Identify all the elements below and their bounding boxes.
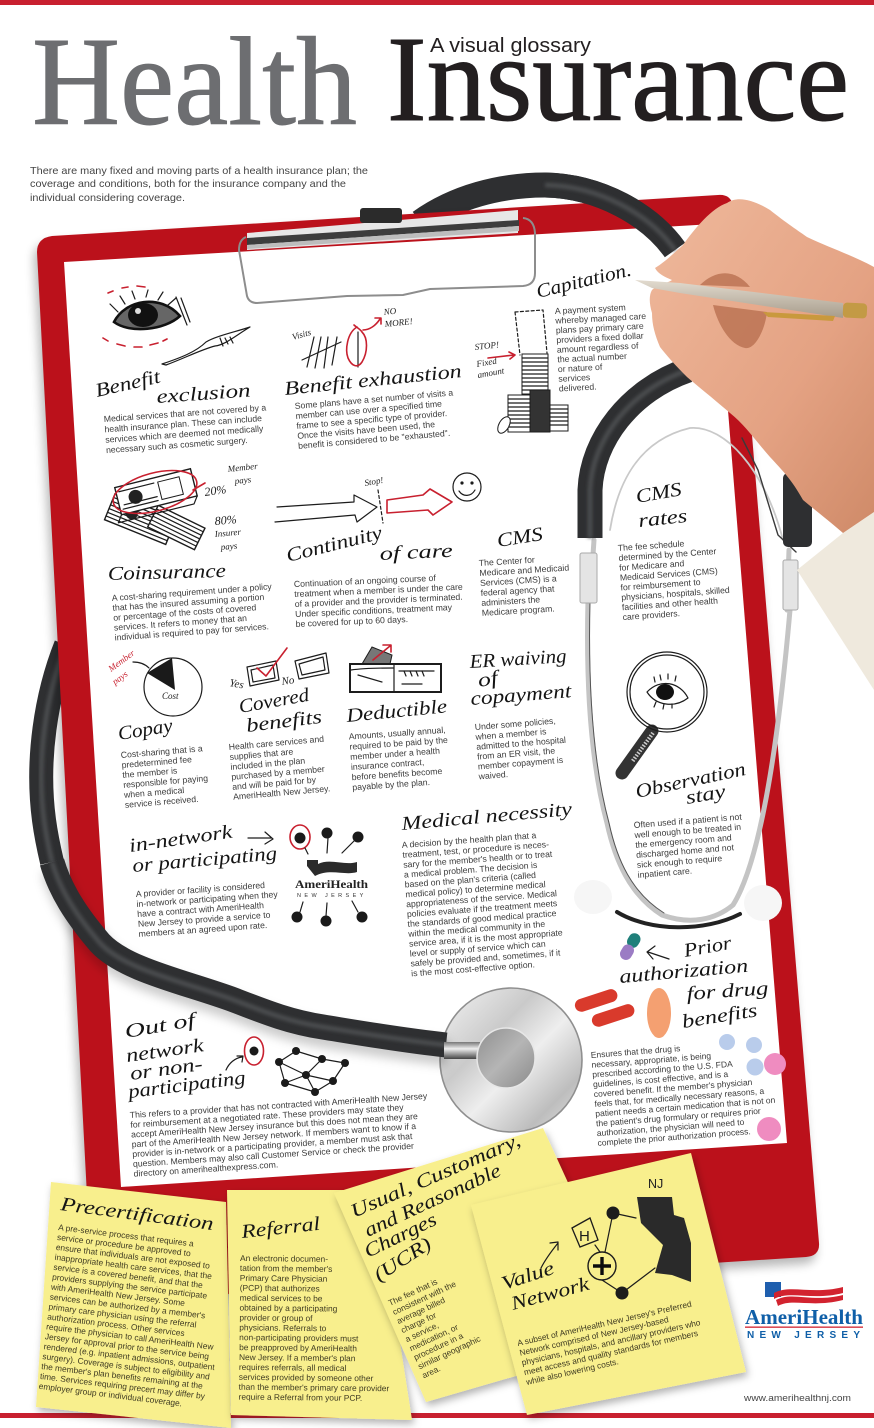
body text: service is a covered benefit, and that the: [53, 1262, 204, 1290]
body text: Some plans have a set number of visits a: [294, 387, 454, 411]
AmeriHealth logo: [745, 1282, 863, 1341]
body text: Continuation of an ongoing course of: [294, 573, 437, 589]
body text: level or supply of service which can: [409, 939, 546, 959]
entry: covered benefits: [228, 648, 331, 802]
body text: non-participating providers must: [239, 1332, 359, 1343]
body text: appropriateness of the service. Medical: [406, 888, 557, 909]
body text: responsible for paying: [123, 773, 208, 790]
icon: coin stacks with fixed amount: STOP!: [474, 339, 499, 352]
body text: and will be paid for by: [232, 774, 317, 792]
body text: Medicaid Services (CMS): [620, 566, 718, 583]
heading: medical necessity: Medical necessity: [399, 799, 573, 835]
body text: while also lowering costs.: [524, 1356, 619, 1387]
body text: require a Referral from your PCP.: [239, 1392, 362, 1403]
body text: physicians, hospitals, skilled: [621, 585, 730, 602]
heading: ER waiving of copayment: ER waiving: [468, 646, 567, 673]
body text: Network comprised of New Jersey-based: [518, 1314, 670, 1358]
shirt cuff: [797, 512, 874, 690]
sticky note: usual customary and reasonable: [334, 1128, 640, 1402]
body text: New Jersey to provide a service to: [138, 910, 271, 929]
body text: well enough to be treated in: [633, 822, 742, 840]
heading: capitation: Capitation.: [534, 260, 633, 303]
sticky note: value network: [471, 1153, 746, 1415]
heading: covered benefits: Covered: [237, 685, 311, 718]
icon: tally marks with red circle: [291, 306, 413, 368]
heading: CMS rates: CMS: [634, 479, 683, 508]
body text: services which are deemed not medically: [105, 423, 264, 445]
heading: [499, 1258, 592, 1315]
body text: services can be authorized by a member's: [49, 1292, 206, 1321]
heading: prior authorization for drug benefits: authorization: [619, 956, 749, 988]
body text: procedure in a: [412, 1330, 465, 1362]
entry: coinsurance: [105, 461, 276, 642]
body text: question. Members may also call Customer Service or check the provider: [133, 1141, 414, 1169]
body text: obtained by a participating: [239, 1302, 338, 1314]
body text: area.: [420, 1363, 442, 1380]
heading: benefit exclusion: Benefit: [93, 366, 163, 402]
body text: the patient's drug formulary or requires prior: [596, 1106, 761, 1128]
body text: within the medical community in the: [407, 919, 546, 939]
body text: the standards of good medical practice: [407, 908, 557, 929]
body text: This refers to a provider that has not contracted with AmeriHealth New Jersey: [129, 1091, 428, 1120]
heading: ER waiving of copayment: [468, 646, 573, 710]
heading: ER waiving of copayment: copayment: [470, 681, 573, 710]
wire sleeves: [580, 553, 597, 603]
body text: for Medicare and: [619, 558, 685, 573]
body text: New Jersey. If a member's plan: [239, 1352, 356, 1363]
heading: out of network or non-participating: Out of: [123, 1009, 200, 1043]
body text: sick enough to require: [637, 853, 723, 870]
body text: Medicare and Medicaid: [479, 563, 570, 578]
heading: continuity of care: Continuity: [284, 523, 385, 567]
body text: rendered (e.g. inpatient admissions, outpatient: [43, 1341, 216, 1372]
icon: coin stacks with fixed amount: [474, 310, 568, 435]
body text: federal agency that: [480, 583, 555, 598]
heading: out of network or non-participating: [123, 1009, 247, 1103]
body text: complete the prior authorization process.: [597, 1126, 751, 1148]
body text: insurance contract,: [351, 757, 425, 772]
entry: copay: [105, 648, 210, 810]
body text: average billed: [395, 1295, 447, 1326]
body text: necessary, appropriate, is being: [591, 1051, 712, 1070]
body text: require the physician to call AmeriHealth New: [46, 1321, 215, 1352]
heading: benefit exhaustion: Benefit exhaustion: [283, 361, 463, 400]
entry: continuity of care: [275, 473, 481, 629]
body text: Under specific conditions, treatment may: [295, 602, 453, 619]
stethoscope front tube: [52, 862, 448, 1053]
body text: Health care services and: [228, 734, 325, 752]
heading: in-network or participating: in-network: [128, 822, 234, 857]
icon: money stacks with percentages: [105, 461, 259, 552]
body text: charge for: [399, 1310, 438, 1335]
title: Health: [32, 13, 357, 152]
entry: in-network or participating: [128, 822, 368, 939]
entry: benefit exclusion: [93, 286, 269, 455]
stethoscope tube behind clipboard: [41, 185, 675, 862]
AmeriHealth logo: AmeriHealth: [745, 1305, 863, 1329]
body text: from an ER visit, the: [477, 745, 556, 762]
body text: facilities and other health: [622, 596, 718, 612]
body text: the emergency room and: [635, 832, 732, 850]
heading: observation stay: stay: [684, 781, 728, 809]
entry: capitation: [474, 260, 650, 435]
body text: Amounts, usually annual,: [348, 725, 446, 741]
intro text: There are many fixed and moving parts of a health insurance plan; the: [30, 166, 368, 177]
body text: Services (CMS) is a: [480, 573, 557, 588]
body text: Ensures that the drug is: [590, 1043, 681, 1060]
icon: money stacks with percentages: 80%: [214, 512, 237, 528]
body text: covered benefit. If the member's physician: [593, 1077, 753, 1099]
heading: Usual, Customary,: [348, 1130, 524, 1223]
body text: Medical services that are not covered by a: [103, 402, 267, 424]
body text: member can use over a specified time: [295, 398, 442, 421]
title: [32, 12, 849, 152]
heading: observation stay: Observation: [634, 759, 748, 803]
heading: out of network or non-participating: network: [125, 1035, 205, 1067]
heading: deductible: Deductible: [344, 696, 448, 727]
body text: A payment system: [555, 302, 626, 316]
body text: part of the AmeriHealth New Jersey network. If members want to know if a: [131, 1121, 416, 1149]
icon: arrows with stop line and smiley: Stop!: [364, 475, 384, 488]
entry: observation stay: [622, 652, 748, 880]
body text: A subset of AmeriHealth New Jersey's Preferred: [516, 1299, 693, 1348]
heading: out of network or non-participating: or non-: [129, 1054, 204, 1085]
icon: provider network around logo: [290, 825, 368, 926]
body text: physicians, hospitals, and ancillary providers who: [521, 1317, 702, 1367]
body text: employer group or individual coverage.: [38, 1381, 183, 1408]
body text: necessary such as cosmetic surgery.: [106, 435, 248, 455]
icon: New Jersey network diagram: [541, 1177, 691, 1300]
heading: and Reasonable: [361, 1160, 505, 1242]
heading: covered benefits: [237, 685, 323, 737]
body text: Cost-sharing that is a: [120, 743, 203, 760]
intro text: [30, 166, 368, 204]
body text: be covered for up to 60 days.: [295, 614, 408, 629]
body text: The fee that is: [387, 1276, 439, 1308]
stethoscope ear tips: [574, 880, 782, 921]
heading: Precertification: [58, 1194, 215, 1235]
body text: or nature of: [558, 362, 603, 374]
body text: A pre-service process that requires a: [58, 1222, 195, 1249]
body text: have a contract with AmeriHealth: [137, 900, 264, 919]
heading: out of network or non-participating: participating: [125, 1068, 247, 1103]
icon: yes and no checkboxes: No: [280, 674, 296, 688]
heading: [348, 1130, 524, 1286]
body text: Often used if a patient is not: [633, 811, 743, 830]
spring band: [617, 912, 740, 927]
arrow: [248, 832, 273, 844]
heading: Network: [508, 1274, 592, 1315]
body text: time. Services requiring precert may differ by: [39, 1371, 206, 1401]
body text: sary for the member's health or to treat: [403, 849, 553, 870]
heading: Charges: [361, 1209, 440, 1262]
body text: based on the plan's criteria (called: [404, 870, 536, 889]
clip button: [360, 208, 402, 223]
body text: the actual number: [557, 351, 627, 364]
body text: medical services to be: [240, 1293, 323, 1303]
heading: continuity of care: of care: [379, 541, 454, 565]
entry: ER waiving of copayment: [468, 646, 573, 781]
body text: authorization process. Other services: [47, 1311, 185, 1338]
subtitle: A visual glossary: [430, 35, 591, 57]
body text: benefit is considered to be "exhausted".: [298, 428, 451, 451]
body text: A cost-sharing requirement under a policy: [111, 581, 273, 603]
icon: tally marks with red circle: Visits: [291, 327, 313, 342]
body text: amount regardless of: [557, 340, 639, 355]
icon: money stacks with percentages: Insurer: [213, 527, 242, 539]
heading: coinsurance: Coinsurance: [108, 561, 226, 585]
body text: a service,: [404, 1320, 440, 1344]
icon: pie chart of cost: [105, 648, 202, 716]
pen: [635, 280, 867, 321]
icon: tally marks with red circle: NO: [382, 306, 397, 317]
body text: predetermined fee: [121, 754, 192, 770]
body text: service area, if it is the most appropriate: [409, 927, 563, 949]
icon: money stacks with percentages: 20%: [203, 482, 227, 499]
body text: included in the plan: [230, 755, 306, 772]
body text: admitted to the hospital: [476, 735, 566, 752]
stethoscope top arch: [545, 185, 675, 250]
body text: medication, or: [408, 1322, 460, 1353]
heading: Value: [499, 1258, 557, 1295]
icon: tally marks with red circle: MORE!: [383, 316, 413, 329]
body text: providers supplying the service participate: [52, 1272, 208, 1301]
entry: benefit exhaustion: [283, 306, 463, 451]
body text: in-network or participating when they: [136, 889, 279, 909]
heading: prior authorization for drug benefits: Prior: [681, 933, 734, 962]
body text: accept AmeriHealth New Jersey insurance but this does not mean they are: [131, 1111, 418, 1140]
body text: required to be paid by the: [349, 735, 448, 752]
icon: assorted pills: [573, 931, 786, 1141]
body text: purchased by a member: [231, 764, 325, 782]
heading: in-network or participating: [128, 822, 278, 877]
body text: requires referrals, all medical: [239, 1362, 347, 1373]
clipboard shadow: [34, 202, 816, 1309]
heading: copay: Copay: [116, 716, 174, 745]
body text: care providers.: [622, 608, 680, 622]
body text: or percentage of the costs of covered: [113, 602, 257, 623]
icon: money stacks with percentages: pays: [219, 541, 238, 552]
body text: policies evaluate if the treatment meets: [406, 898, 558, 919]
clipboard metal clip: [239, 208, 535, 303]
body text: inappropriate health care services, that the: [54, 1252, 213, 1281]
entry: CMS rates: [617, 479, 732, 622]
sticky note: precertification: [36, 1182, 231, 1428]
body text: is the most cost-effective option.: [411, 959, 535, 978]
icon: yes and no checkboxes: [228, 648, 329, 691]
body text: similar geographic: [416, 1333, 482, 1371]
body text: when a medical: [123, 785, 185, 800]
heading: (UCR): [370, 1234, 435, 1286]
body text: determined by the Center: [618, 546, 717, 563]
icon: money stacks with percentages: Member: [226, 461, 259, 474]
heading: prior authorization for drug benefits: benefits: [680, 1000, 759, 1033]
body text: supplies that are: [229, 746, 294, 762]
heading: benefit exclusion: exclusion: [156, 380, 251, 408]
icon: arrows with stop line and smiley: [275, 473, 481, 523]
heading: covered benefits: benefits: [245, 707, 323, 737]
icon: money stacks with percentages: pays: [233, 474, 252, 486]
icon: provider network around logo: AmeriHealth: [295, 877, 368, 891]
icon: New Jersey network diagram: NJ: [648, 1177, 663, 1191]
body text: primary care physician using the referral: [48, 1301, 197, 1330]
icon: pie chart of cost: Member: [105, 648, 137, 674]
body text: of a provider and the provider is terminated.: [295, 592, 463, 609]
heading: benefit exclusion: [93, 366, 251, 408]
entry: prior authorization: [573, 931, 786, 1148]
body text: An electronic documen-: [240, 1253, 328, 1264]
body text: member copayment is: [477, 755, 564, 771]
body text: Under some policies,: [474, 716, 556, 732]
bottom red bar: [0, 1413, 874, 1418]
icon: open wallet: [350, 645, 441, 692]
body text: provider is in-network or a participating provider, a member must ask that: [132, 1131, 413, 1159]
icon: coin stacks with fixed amount: amount: [477, 365, 505, 380]
body text: service is received.: [124, 794, 199, 810]
body text: consistent with the: [391, 1279, 458, 1317]
body text: (PCP) that authorizes: [240, 1283, 320, 1294]
body text: A decision by the health plan that a: [401, 830, 537, 850]
body text: inpatient care.: [637, 866, 692, 880]
intro text: coverage and conditions, both for the insurance company and the: [30, 179, 346, 190]
body text: for reimbursement at a negotiated rate. These providers may state they: [130, 1102, 404, 1130]
body text: payable by the plan.: [352, 777, 430, 792]
icon: New Jersey network diagram: H: [579, 1228, 590, 1245]
body text: AmeriHealth New Jersey.: [233, 783, 331, 802]
body text: when a member is: [474, 726, 547, 742]
body text: providers a fixed dollar: [556, 330, 644, 345]
body text: the member's plan benefits remaining at the: [41, 1361, 204, 1391]
body text: treatment, test, or procedure is neces-: [402, 839, 549, 860]
body text: meet access and quality standards for members: [523, 1328, 699, 1377]
body text: Once the visits have been used, the: [297, 419, 436, 441]
body text: administers the: [481, 594, 541, 608]
heading: Referral: [239, 1214, 321, 1243]
body text: provider or group of: [239, 1312, 313, 1323]
heading: CMS rates: rates: [637, 506, 688, 532]
stethoscope chest piece disc: [440, 988, 582, 1132]
heading: CMS: CMS: [495, 524, 545, 552]
sticky note: referral: [227, 1190, 412, 1420]
body text: The fee schedule: [617, 538, 685, 553]
clipboard paper: [64, 224, 787, 1187]
body text: surgery). Coverage is subject to eligibility and: [42, 1351, 211, 1382]
body text: services provided by someone other: [239, 1372, 374, 1383]
heading: prior authorization for drug benefits: for drug: [686, 978, 769, 1005]
entry: deductible: [344, 645, 451, 792]
hand holding pen: [635, 199, 874, 533]
body text: feels that, for medically necessary reasons, a: [594, 1086, 765, 1109]
body text: before benefits become: [351, 766, 443, 782]
body text: services. It refers to money that an: [114, 613, 247, 633]
website url: www.amerihealthnj.com: [743, 1393, 851, 1404]
body text: Primary Care Physician: [240, 1273, 328, 1284]
body text: patient needs a certain medication that is not on: [595, 1095, 776, 1119]
body text: service or procedure be approved to: [57, 1232, 192, 1258]
clipboard board: [37, 195, 819, 1302]
body text: directory on amerihealthexpress.com.: [133, 1159, 278, 1179]
icon: isolated provider and network graph: [226, 1037, 349, 1096]
body text: prescribed according to the U.S. FDA: [592, 1059, 733, 1080]
heading: CMS rates: [634, 479, 688, 532]
body text: be preapproved by AmeriHealth: [239, 1342, 357, 1353]
body text: the member is: [122, 765, 178, 780]
entry: out of network: [123, 1009, 432, 1179]
body text: a medical problem. The decision is: [404, 860, 538, 880]
body text: that has the insured assuming a portion: [112, 592, 265, 613]
body text: health insurance plan. These can include: [104, 413, 262, 434]
heading: continuity of care: [284, 523, 454, 567]
body text: delivered.: [559, 382, 597, 393]
body text: medical policy) to determine medical: [405, 879, 546, 899]
body text: authorization, the physician will need to: [596, 1117, 745, 1138]
top red bar: [0, 0, 874, 5]
stethoscope silver binaurals: [580, 428, 798, 927]
body text: A provider or facility is considered: [135, 880, 265, 899]
icon: coin stacks with fixed amount: Fixed: [475, 355, 498, 369]
body text: waived.: [477, 769, 508, 781]
icon: pie chart of cost: Cost: [162, 691, 179, 701]
body text: individual is required to pay for services.: [114, 621, 269, 642]
body text: whereby managed care: [554, 311, 646, 326]
body text: physicians. Referrals to: [239, 1322, 327, 1333]
body text: plans pay primary care: [556, 321, 644, 335]
body text: treatment when a member is under the care: [294, 582, 463, 599]
intro text: individual considering coverage.: [30, 193, 185, 204]
AmeriHealth logo: NEW JERSEY: [747, 1330, 860, 1341]
body text: with AmeriHealth New Jersey. Some: [49, 1281, 186, 1308]
entry: medical necessity: [399, 799, 573, 978]
body text: ensure that individuals are not exposed to: [55, 1242, 211, 1271]
body text: The Center for: [479, 555, 535, 568]
heading: ER waiving of copayment: of: [476, 667, 503, 692]
body text: services: [558, 372, 591, 384]
icon: yes and no checkboxes: Yes: [228, 677, 245, 691]
stethoscope stem and inner disc: [444, 1028, 535, 1088]
body text: guidelines, is cost effective, and is a: [593, 1069, 729, 1089]
icon: magnifying glass over eye: [622, 652, 707, 773]
body text: frame to see a specific type of provider.: [296, 408, 447, 431]
heading: in-network or participating: or participating: [132, 843, 278, 877]
body text: than the member's primary care provider: [239, 1382, 389, 1393]
body text: safely be provided and, sometimes, if it: [410, 947, 561, 968]
body text: Medicare program.: [482, 603, 555, 618]
icon: provider network around logo: NEW JERSEY: [297, 893, 367, 899]
entry: CMS: [479, 524, 572, 618]
icon: pie chart of cost: pays: [109, 669, 130, 687]
icon: scalpel: [162, 327, 250, 365]
body text: members at an agreed upon rate.: [138, 920, 268, 939]
body text: tation from the member's: [240, 1263, 332, 1274]
heading: prior authorization for drug benefits: [619, 933, 769, 1033]
body text: Jersey for approval prior to the service being: [44, 1331, 210, 1361]
body text: for reimbursement to: [620, 577, 701, 592]
body text: discharged home and not: [636, 842, 735, 860]
icon: eye with red surgical marks: [103, 286, 190, 347]
stethoscope black ear tubes: [590, 370, 812, 547]
body text: member under a health: [350, 746, 440, 762]
title: Insurance: [387, 12, 849, 147]
